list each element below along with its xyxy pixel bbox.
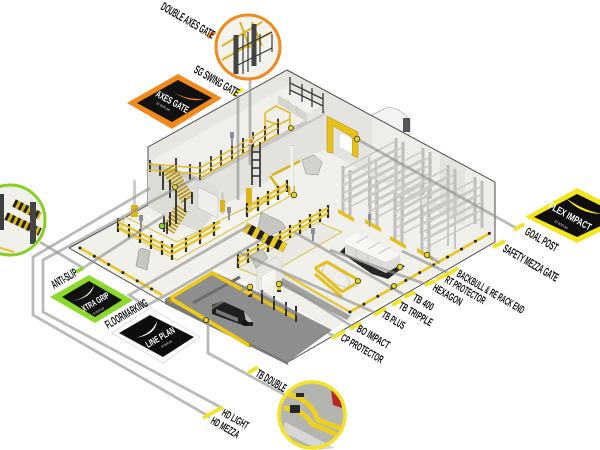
badge inner — [119, 315, 194, 357]
building outline — [69, 70, 495, 362]
label: tb 400: TB 400 — [410, 292, 436, 314]
mezzanine deck edge — [148, 110, 325, 182]
forklift back — [302, 155, 322, 175]
callout: anti-slip stairs — [0, 185, 45, 255]
pallet sides — [345, 244, 400, 273]
post right — [30, 202, 36, 244]
roof unit outside building — [372, 107, 410, 140]
badge frame — [50, 275, 133, 323]
yellow rail — [284, 394, 340, 434]
marker: rack end — [424, 252, 430, 258]
badge swoosh — [135, 321, 157, 338]
badge swoosh — [168, 88, 204, 100]
upper ramp ledge — [283, 273, 351, 316]
marker: column guard — [291, 192, 297, 198]
mezzanine rail — [148, 119, 278, 180]
badge byline: BY BOPLAN — [554, 219, 569, 230]
stair flight lower — [168, 208, 182, 230]
line: tb double — [208, 286, 287, 396]
line: cp protector — [260, 291, 335, 337]
line: backrull — [402, 251, 450, 274]
building — [69, 70, 495, 365]
label: double axes gate: DOUBLE AXES GATE — [158, 0, 217, 42]
bolts — [290, 393, 304, 413]
hazard stripes — [245, 227, 285, 248]
mark: safety mezza gate — [493, 241, 505, 247]
badge: flex impact — [525, 188, 600, 243]
mezzanine side room — [148, 165, 218, 232]
mark: anti-slip — [76, 268, 83, 272]
operators and machines — [250, 212, 286, 268]
badge inner — [534, 194, 600, 237]
dock connector band — [193, 277, 240, 303]
ladder — [252, 142, 260, 187]
person on mezzanine — [230, 132, 234, 146]
bright wall segments — [372, 115, 495, 242]
dock pit — [165, 271, 351, 365]
badge: line plan — [112, 308, 200, 363]
badge swoosh — [566, 198, 600, 214]
back wall left — [148, 70, 287, 207]
badge byline: BY BOPLAN — [92, 306, 105, 316]
pallet zone dark base — [340, 244, 405, 279]
badge: axes gate — [127, 74, 222, 129]
column bases — [131, 186, 295, 217]
badge byline: BY BOPLAN — [160, 339, 173, 349]
floor line — [0, 240, 14, 252]
floor lines behind — [270, 161, 300, 190]
label: hexagon: HEXAGON — [430, 282, 464, 309]
badge byline: BY BOPLAN — [156, 101, 171, 112]
post left — [0, 194, 4, 230]
pallet tops — [345, 233, 400, 263]
badge name: LINE PLAN — [144, 325, 177, 351]
marker: door guard — [276, 281, 282, 287]
badge: extra grip — [50, 275, 133, 323]
marker: mezzanine gate — [288, 125, 294, 131]
pillars and column guards — [133, 145, 294, 216]
line: bo impact — [280, 281, 353, 327]
line: safety mezza gate — [427, 255, 440, 263]
callout: double axes gate — [216, 15, 280, 79]
back wall right — [287, 70, 495, 242]
line: anti-slip — [40, 215, 165, 268]
pallet boxes — [345, 233, 400, 273]
line: column to wall stem — [290, 146, 294, 195]
line: tb plus — [238, 252, 378, 314]
badge frame — [127, 74, 222, 129]
label: anti-slip: ANTI-SLIP — [48, 265, 80, 292]
red tag — [331, 390, 342, 408]
stacked pallets on mezzanine — [278, 88, 322, 122]
label: tb tripple: TB TRIPPLE — [396, 300, 435, 329]
delivery van — [212, 301, 253, 326]
marker: bin — [355, 278, 361, 284]
mezzanine deck — [148, 86, 325, 177]
circle ring — [216, 15, 280, 79]
line: floormarking — [129, 225, 264, 306]
dock floor — [165, 271, 332, 362]
line: hd light — [43, 178, 222, 408]
dock bumpers — [170, 273, 250, 347]
floor bumper left — [80, 248, 162, 295]
circle ring — [279, 382, 345, 448]
person figures — [139, 207, 371, 241]
floor walkway zone — [120, 190, 292, 260]
circle ring — [0, 185, 45, 255]
marker: pallet zone — [397, 264, 403, 270]
marker dots — [172, 125, 430, 323]
label: tb plus: TB PLUS — [380, 309, 407, 332]
stair flight upper — [168, 168, 188, 200]
small office block — [198, 187, 218, 218]
dock bottom edge — [165, 299, 288, 365]
label: tb double: TB DOUBLE — [254, 366, 289, 395]
mezzanine back rail — [290, 77, 323, 113]
label: cp protector: CP PROTECTOR — [338, 332, 385, 366]
loading door — [327, 116, 358, 158]
marker: dock rail — [203, 317, 209, 323]
fence front left — [118, 218, 220, 260]
hazard tread stripes — [6, 203, 40, 232]
door guard bands — [250, 281, 279, 297]
gate bars — [236, 32, 272, 74]
fence second — [238, 205, 328, 268]
badge swoosh — [72, 285, 94, 301]
marker: anti-slip — [159, 223, 165, 229]
label: rt protector: RT PROTECTOR — [442, 274, 487, 307]
mark: hd labels — [203, 407, 223, 418]
label: hd light: HD LIGHT — [220, 407, 251, 432]
mark: tb double — [248, 367, 258, 373]
badge inner — [62, 281, 122, 317]
label: floormarking: FLOORMARKING — [102, 296, 150, 332]
bin with barriers — [315, 262, 360, 297]
mark: rt protector — [436, 274, 447, 280]
mark: double axes gate — [207, 32, 215, 37]
badge frame — [112, 308, 200, 363]
marker: door guard left — [247, 284, 253, 290]
floor strip — [282, 422, 335, 450]
dock ramp — [265, 284, 347, 330]
floor slab — [69, 128, 495, 322]
line: double axes gate — [249, 78, 251, 165]
pallet racks — [338, 138, 482, 261]
gate posts — [236, 24, 254, 74]
marker: goal post — [354, 136, 360, 142]
dock door box — [257, 257, 282, 292]
marker: bumper — [391, 283, 397, 289]
gate rails — [222, 22, 272, 60]
marker: axes gate — [248, 138, 254, 144]
connector lines — [33, 78, 516, 417]
mark: tb tripple — [392, 300, 402, 305]
mark: hexagon — [425, 281, 435, 285]
badge name: AXES GATE — [154, 89, 191, 116]
mark: cp protector — [332, 331, 345, 338]
line: hexagon — [330, 250, 428, 285]
callout: bumper detail — [279, 382, 345, 450]
fence upper — [247, 180, 287, 217]
floor bumper right — [283, 233, 490, 312]
badge name: XTRA GRIP — [80, 290, 111, 314]
label: backrull and rack end: BACKBULL & RE RACK END — [454, 268, 526, 317]
circle background — [0, 185, 45, 255]
line: hd mezza — [33, 188, 210, 417]
pallet seams — [356, 236, 390, 264]
mark: tb 400 — [404, 292, 415, 297]
scanner cart — [136, 248, 150, 270]
walkway zone right — [238, 222, 342, 278]
dock retaining band — [278, 277, 351, 320]
label: sg swing gate: SG SWING GATE — [192, 62, 242, 100]
badge frame — [525, 188, 600, 243]
dock side rail — [253, 290, 296, 322]
label: bo impact: BO IMPACT — [354, 323, 392, 352]
mark: sg swing gate — [232, 89, 243, 95]
slab end wall — [165, 265, 262, 300]
label marks — [76, 32, 524, 418]
label: goal post: GOAL POST — [522, 224, 561, 255]
circle background — [279, 382, 345, 448]
mark: tb plus — [374, 308, 386, 315]
hazard treads — [6, 203, 40, 232]
mezzanine under-wall — [200, 113, 323, 208]
badge inner — [137, 80, 212, 122]
line: sg swing gate — [237, 95, 239, 200]
mark: bo impact — [350, 323, 361, 329]
line: goal post — [357, 139, 516, 228]
line: tb 400 — [294, 232, 408, 297]
circle background — [216, 15, 280, 79]
hazard stripe crossing — [245, 227, 285, 248]
stair posts — [163, 172, 192, 234]
mark: backrull and rack end — [445, 268, 458, 276]
mark: goal post — [514, 224, 524, 230]
door guards — [250, 281, 279, 297]
mezzanine gate — [265, 106, 290, 134]
marker: stairs — [172, 184, 178, 190]
